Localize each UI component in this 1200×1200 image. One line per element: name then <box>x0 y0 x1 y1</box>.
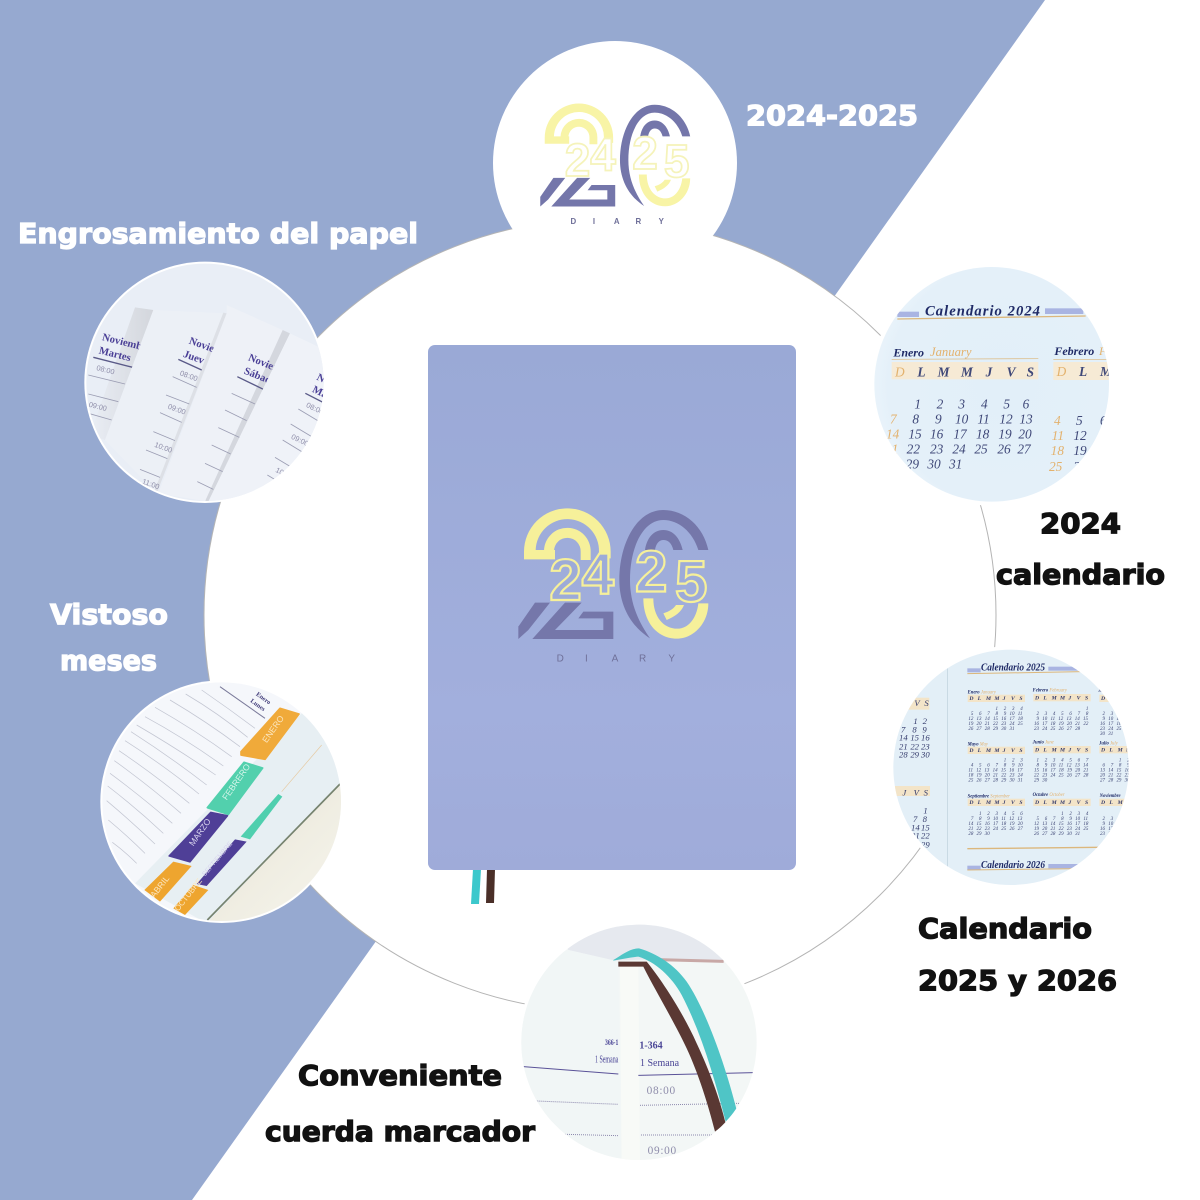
days: July 2025: 1 2 <box>1100 759 1130 764</box>
heading: convenient bookmark cord: Conveniente <box>298 1059 502 1092</box>
panel: calendar 2025 and 2026 photo: 7 <box>901 724 906 734</box>
panel: calendar 2025 and 2026 photo: 22 <box>910 741 920 751</box>
panel: month tabs photo: FEBRERO <box>220 762 252 802</box>
logo on cover <box>518 508 708 664</box>
panel: calendar 2024 photo: February <box>1098 344 1145 358</box>
days: May and June 2025: 22 23 24 25 26 27 28 <box>1034 774 1089 779</box>
days: July 2025: 6 7 8 9 <box>1100 764 1130 769</box>
panel: calendar 2025 and 2026 photo: 22 <box>921 831 930 841</box>
panel: calendar 2024 photo: 29 <box>906 456 919 471</box>
days: September and October 2025: 28 29 30 <box>968 832 990 837</box>
panel: calendar 2025 and 2026 photo: Marzo <box>1097 689 1111 694</box>
panel: calendar 2025 and 2026 photo: DLMMJVS <box>968 748 1022 754</box>
panel: calendar 2025 and 2026 photo: 29 <box>921 839 930 849</box>
panel: calendar 2025 and 2026 photo: Junio June <box>1032 741 1054 746</box>
days: September and October 2025: 5 6 7 8 9 10 11 <box>1034 817 1088 822</box>
days: September and October 2025: 7 8 9 10 11 12 13 <box>968 817 1023 822</box>
panel: calendar 2025 and 2026 photo: 16 <box>921 733 930 743</box>
panel: bookmark ribbon photo: 366-1 <box>605 1037 618 1047</box>
days: November 2025: 2 3 4 <box>1100 817 1122 822</box>
panel: calendar 2024 photo: 27 <box>1017 441 1032 456</box>
days: March 2025: 30 31 <box>1100 732 1113 737</box>
panel: calendar 2024 photo: 20 <box>1018 426 1032 441</box>
days: January and February 2025: 5 6 7 8 9 10 11 <box>968 712 1022 717</box>
days: March 2025 <box>1100 712 1122 737</box>
logo: 2024-2025 diary: 5 <box>664 135 689 187</box>
panel: calendar 2025 and 2026 photo: 14 <box>911 822 920 832</box>
days: January and February 2025: 16 17 18 19 20 21 22 <box>1034 722 1089 727</box>
panel: month tabs photo <box>95 680 348 930</box>
days: May and June 2025: 29 30 <box>1034 779 1048 784</box>
panel: calendar 2025 and 2026 photo: Septiembre September <box>968 794 1010 799</box>
panel: calendar 2024 photo: LM <box>1078 364 1113 379</box>
heading: 2025 and 2026 calendar: Calendario <box>918 912 1092 945</box>
heading: 2024 calendar: calendario <box>996 558 1165 591</box>
panel: month tabs photo: ENERO <box>260 713 286 744</box>
panel: calendar 2025 and 2026 photo: Mayo May <box>967 742 989 747</box>
panel: calendar 2025 and 2026 photo: 1 <box>923 805 928 815</box>
panel: bookmark ribbon photo: 1 Semana <box>640 1058 680 1069</box>
days: January and February 2025: 1 2 3 4 <box>968 707 1023 712</box>
panel: thick paper photo: Novier <box>247 353 279 374</box>
panel: calendar 2025 and 2026 photo: 23 <box>921 741 930 751</box>
panel: thick paper photo: 10:00 <box>153 440 174 455</box>
logo: 2024-2025 diary: 2 <box>632 127 658 179</box>
panel: bookmark ribbon photo <box>522 924 756 1160</box>
panel: calendar 2025 and 2026 photo: 78 <box>913 814 928 824</box>
panel: calendar 2025 and 2026 photo <box>885 646 1138 890</box>
logo: 2024-2025 diary: 4 <box>590 129 616 181</box>
panel: calendar 2024 photo: Enero <box>892 346 924 360</box>
bookmark ribbons <box>471 869 495 904</box>
panel: calendar 2024 photo: 12 <box>999 411 1013 426</box>
days: November 2025 <box>1100 816 1114 835</box>
panel: thick paper photo: Mar <box>310 384 333 403</box>
panel: calendar 2025 and 2026 photo: JVS <box>902 787 929 797</box>
panel: bookmark ribbon photo: 1-364 <box>639 1040 663 1051</box>
days: January and February 2025: 23 24 25 26 27 28 <box>1034 727 1081 732</box>
panel: calendar 2024 photo: 30 <box>926 456 941 471</box>
panel: calendar 2024 photo: 31 <box>948 456 962 471</box>
logo on cover: 2 <box>549 548 582 613</box>
days: May and June 2025: 1 2 3 <box>968 759 1023 764</box>
panel: calendar 2024 photo: 8 <box>912 411 919 426</box>
days: September and October 2025: 12 13 14 15 16 17 18 <box>1034 822 1089 827</box>
panel: calendar 2024 photo: 23 <box>930 441 944 456</box>
panel: calendar 2024 photo: 18 <box>1051 443 1064 458</box>
logo on cover: DIARY <box>557 653 675 664</box>
panel: calendar 2025 and 2026 photo: 8 <box>912 724 917 734</box>
panel: calendar 2025 and 2026 photo: Febrero February <box>1033 688 1068 693</box>
panel: calendar 2024 photo: 10 <box>955 411 969 426</box>
large central white circle <box>204 219 996 1011</box>
panel: calendar 2025 and 2026 photo: DLMMJVS <box>968 800 1022 806</box>
panel: calendar 2024 photo: 7 <box>890 411 898 426</box>
panel: calendar 2025 and 2026 photo: Calendario 2025 <box>981 663 1045 674</box>
panel: calendar 2024 photo: 15 <box>908 426 922 441</box>
panel: calendar 2024 photo: 21 <box>885 441 898 456</box>
logo on cover: 4 <box>582 541 615 606</box>
days: January and February 2025: 2 3 4 5 6 7 8 <box>1034 712 1089 717</box>
heading: colorful months: Vistoso <box>50 598 168 631</box>
panel: calendar 2024 photo: 14 <box>886 426 900 441</box>
panel: calendar 2025 and 2026 photo: Octubre October <box>1033 793 1065 798</box>
panel: calendar 2024 photo: 19 <box>998 426 1012 441</box>
panel: calendar 2025 and 2026 photo: 15 <box>910 733 920 743</box>
panel: thick paper photo: 08:00 <box>305 400 325 417</box>
heading: 2025 and 2026 calendar <box>918 912 1117 997</box>
panel: calendar 2024 photo: 4 <box>1054 413 1061 428</box>
days: November 2025: 23 24 25 <box>1100 832 1122 837</box>
panel: month tabs photo: Lunes <box>249 698 267 713</box>
panel: bookmark ribbon photo: 1 Semana <box>595 1054 619 1065</box>
panel: thick paper photo: 08:00 <box>179 368 199 383</box>
panel: calendar 2025 and 2026 photo: 28 <box>899 750 908 760</box>
heading: convenient bookmark cord: cuerda marcador <box>265 1115 535 1148</box>
panel: calendar 2024 photo: 17 <box>953 426 968 441</box>
panel: calendar 2025 and 2026 photo: 30 <box>920 750 930 760</box>
panel: calendar 2024 photo: 25 <box>974 441 988 456</box>
panel: calendar 2024 photo: Febrero <box>1053 344 1094 358</box>
panel: thick paper photo: Nov <box>315 372 337 390</box>
panel: calendar 2024 photo: D <box>1056 364 1067 379</box>
days: July 2025: 13 14 15 16 <box>1100 769 1130 774</box>
panel: calendar 2025 and 2026 photo: DLMMJVS <box>1034 800 1088 806</box>
panel: calendar 2024 photo: 123456 <box>914 396 1030 411</box>
panel: calendar 2025 and 2026 photo: 14 <box>899 733 908 743</box>
days: January and February 2025: 12 13 14 15 16 17 18 <box>968 717 1023 722</box>
panel: calendar 2025 and 2026 photo: 21 <box>911 831 920 841</box>
panel: calendar 2024 photo: 18 <box>976 426 990 441</box>
panel: calendar 2025 and 2026 photo: VS <box>914 698 929 708</box>
panel: thick paper photo: Novie <box>187 336 216 355</box>
panel: calendar 2024 photo: 26 <box>1073 459 1087 474</box>
panel: thick paper photo: 09:00 <box>88 400 108 413</box>
days: November 2025: 9 10 11 <box>1100 822 1121 827</box>
days: January and February 2025 <box>968 707 1089 732</box>
days: May and June 2025: 15 16 17 18 19 20 21 <box>1034 769 1088 774</box>
panel: calendar 2025 and 2026 photo: Noviembre <box>1099 794 1121 799</box>
heading: convenient bookmark cord <box>265 1059 535 1148</box>
panel: thick paper photo: 08:00 <box>96 363 115 376</box>
days: March 2025: 2 3 4 <box>1100 712 1122 717</box>
days: May and June 2025: 4 5 6 7 8 9 10 <box>968 764 1023 769</box>
panel: month tabs photo: MARZO <box>187 816 213 848</box>
panel: calendar 2024 photo: 19 <box>1073 443 1087 458</box>
panel: calendar 2024 photo: 9 <box>935 411 942 426</box>
logo: 2024-2025 diary <box>540 103 690 226</box>
days: May and June 2025: 25 26 27 28 29 30 31 <box>968 779 1023 784</box>
days: May and June 2025: 1 2 3 4 5 6 7 <box>1034 759 1089 764</box>
panel: calendar 2025 and 2026 photo: DLMMJVS <box>1034 747 1088 753</box>
panel: calendar 2025 and 2026 photo: 9 <box>922 724 927 734</box>
panel: calendar 2024 photo: 16 <box>930 426 944 441</box>
panel: calendar 2025 and 2026 photo: 21 <box>899 741 908 751</box>
heading: paper thickening: Engrosamiento del papel <box>18 217 418 250</box>
diary cover <box>428 345 796 870</box>
panel: calendar 2024 photo: 13 <box>1019 411 1033 426</box>
panel: calendar 2024 photo: 56 <box>1076 413 1107 428</box>
days: January and February 2025: 9 10 11 12 13 14 15 <box>1034 717 1089 722</box>
panel: calendar 2025 and 2026 photo: DLMMJVS <box>968 696 1022 702</box>
panel: calendar 2025 and 2026 photo: Calendario 2026 <box>981 860 1045 871</box>
panel: calendar 2025 and 2026 photo: 12 <box>913 716 928 726</box>
days: September and October 2025: 21 22 23 24 25 26 27 <box>968 827 1023 832</box>
days: March 2025: 23 24 25 <box>1100 727 1122 732</box>
panel: calendar 2024 photo: 11 <box>977 411 990 426</box>
panel: calendar 2025 and 2026 photo: 15 <box>921 822 930 832</box>
heading: colorful months <box>50 598 168 677</box>
days: January and February 2025: 26 27 28 29 30 31 <box>968 727 1014 732</box>
teal ribbon <box>613 948 737 1122</box>
panel: calendar 2024 photo: 11 <box>1052 428 1064 443</box>
panel: bookmark ribbon photo: 09:00 <box>648 1145 677 1157</box>
panel: main diary book <box>428 345 796 904</box>
panel: calendar 2025 and 2026 photo: Julio July <box>1098 742 1119 747</box>
days: January and February 2025: 19 20 21 22 23 24 25 <box>968 722 1023 727</box>
brown ribbon <box>618 962 726 1132</box>
days: March 2025: 16 17 18 <box>1100 722 1122 727</box>
panel: logo circle <box>493 41 737 285</box>
panel: thick paper photo: Noviemb <box>101 332 143 353</box>
panel: calendar 2024 photo: D <box>894 365 905 380</box>
panel: calendar 2024 photo: 25 <box>1049 459 1063 474</box>
panel: calendar 2024 photo: LMMJVS <box>916 365 1034 380</box>
panel: thick paper photo: 10:00 <box>274 465 295 482</box>
days: May and June 2025: 8 9 10 11 12 13 14 <box>1034 764 1089 769</box>
panel: bookmark ribbon photo: 08:00 <box>647 1085 676 1097</box>
heading: colorful months: meses <box>60 644 157 677</box>
panel: month tabs photo: SEPTIEMBRE <box>201 840 234 878</box>
panel: month tabs photo: OCTUBRE <box>173 877 204 913</box>
panel: thick paper photo: 09:00 <box>167 402 187 416</box>
panel: thick paper photo: Juev <box>182 349 206 367</box>
panel: calendar 2024 photo <box>874 267 1109 506</box>
days: September and October 2025: 1 2 3 4 5 6 <box>968 812 1023 817</box>
days: May and June 2025: 11 12 13 14 15 16 17 <box>968 769 1023 774</box>
panel: calendar 2025 and 2026 photo: DLMM <box>1100 696 1132 702</box>
panel: calendar 2025 and 2026 photo: DLMM <box>1100 747 1132 753</box>
days: September and October 2025: 14 15 16 17 18 19 20 <box>968 822 1023 827</box>
panel: calendar 2024 photo: Calendario 2024 <box>925 303 1040 319</box>
panel: calendar 2025 and 2026 photo: Enero January <box>967 690 997 695</box>
heading: 2024-2025: 2024-2025 <box>746 99 918 132</box>
panel: calendar 2024 photo: 22 <box>907 441 920 456</box>
panel: calendar 2025 and 2026 photo: 29 <box>910 750 920 760</box>
panel: thick paper photo <box>84 262 324 503</box>
days: September and October 2025: 26 27 28 29 30 31 <box>1034 832 1080 837</box>
days: September and October 2025 <box>968 812 1089 837</box>
panel: thick paper photo: Martes <box>98 346 132 364</box>
days: March 2025: 9 10 11 <box>1100 717 1121 722</box>
logo: 2024-2025 diary: 2 <box>565 134 590 186</box>
logo on cover: 2 <box>635 540 667 605</box>
logo on cover: 5 <box>675 550 707 615</box>
panel: thick paper photo: Sábad <box>242 366 273 387</box>
days: May and June 2025: 18 19 20 21 22 23 24 <box>968 774 1023 779</box>
days: July 2025: 27 28 29 30 <box>1100 779 1130 784</box>
days: July 2025 <box>1100 759 1130 784</box>
days: July 2025: 20 21 22 23 <box>1100 774 1130 779</box>
days: September and October 2025: 1 2 3 4 <box>1034 812 1089 817</box>
days: September and October 2025: 19 20 21 22 23 24 25 <box>1034 827 1089 832</box>
panel: calendar 2025 and 2026 photo: DLMMJVS <box>1034 695 1088 701</box>
panel: month tabs photo: ABRIL <box>148 874 171 900</box>
panel: calendar 2025 and 2026 photo: DLMM <box>1100 800 1132 806</box>
days: May and June 2025 <box>968 759 1089 784</box>
panel: calendar 2024 photo: 12 <box>1073 428 1087 443</box>
logo: 2024-2025 diary: DIARY <box>571 217 665 226</box>
panel: calendar 2024 photo: 24 <box>952 441 966 456</box>
panel: month tabs photo: Enero <box>254 691 272 706</box>
days: January and February 2025: 1 <box>1034 707 1088 712</box>
heading: 2024 calendar <box>996 507 1165 591</box>
heading: 2025 and 2026 calendar: 2025 y 2026 <box>918 964 1117 997</box>
panel: calendar 2024 photo: 26 <box>997 441 1011 456</box>
panel: thick paper photo: 09:00 <box>290 432 310 448</box>
heading: 2024 calendar: 2024 <box>1040 507 1121 540</box>
panel: calendar 2024 photo: January <box>930 345 972 359</box>
days: November 2025: 16 17 18 <box>1100 827 1122 832</box>
panel: thick paper photo: 11:00 <box>141 477 161 491</box>
